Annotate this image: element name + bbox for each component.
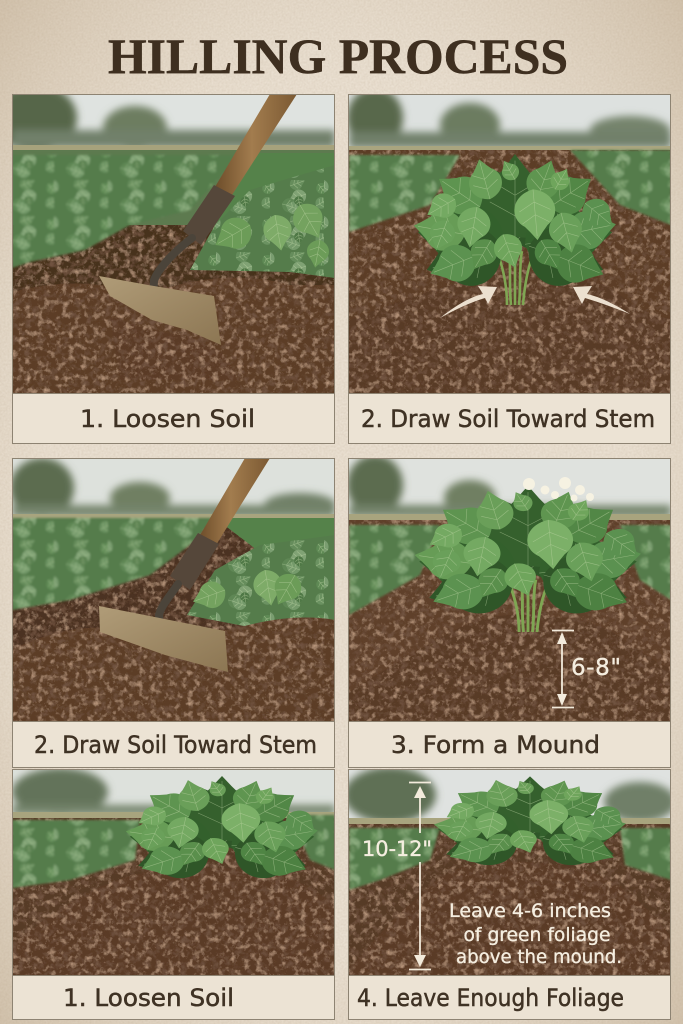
plant bbox=[434, 776, 626, 866]
panel: step 3 draw soil toward stem with hoe bbox=[10, 458, 336, 768]
hoe bbox=[99, 458, 270, 672]
foliage note: above the mound. bbox=[456, 946, 622, 968]
panel: step 6 leave enough foliage bbox=[344, 767, 676, 1020]
foliage note: Leave 4-6 inches bbox=[449, 900, 611, 922]
caption: 1. Loosen Soil bbox=[63, 984, 234, 1012]
photo: hoe loosening soil beside plants bbox=[0, 84, 335, 393]
caption bbox=[12, 394, 334, 444]
title: HILLING PROCESS bbox=[108, 28, 568, 84]
caption: 2. Draw Soil Toward Stem bbox=[361, 405, 655, 433]
height marker 6-8 inches bbox=[552, 630, 621, 708]
foliage note bbox=[450, 902, 620, 964]
plant bbox=[410, 150, 622, 305]
photo: plant with soil drawn up bbox=[347, 88, 671, 393]
caption bbox=[12, 722, 334, 768]
photo: flowering plant on mound with height marker bbox=[347, 455, 671, 721]
flowers bbox=[523, 477, 594, 502]
panel: step 5 loosen soil mound bbox=[12, 768, 336, 1020]
caption bbox=[348, 976, 670, 1020]
caption: 2. Draw Soil Toward Stem bbox=[34, 731, 317, 759]
caption bbox=[348, 722, 670, 768]
arrow right bbox=[573, 286, 630, 314]
arrow left bbox=[440, 286, 497, 318]
hoe bbox=[99, 94, 297, 345]
caption bbox=[12, 976, 334, 1020]
photo: plant atop mound bbox=[12, 768, 336, 975]
caption: 3. Form a Mound bbox=[391, 731, 600, 759]
photo: plant on mound with measurements bbox=[344, 767, 676, 975]
caption: 1. Loosen Soil bbox=[80, 405, 255, 433]
panel: step 2 draw soil toward stem bbox=[347, 88, 671, 444]
height marker 10-12 inches bbox=[362, 782, 432, 970]
height marker 6-8 inches: 6-8" bbox=[571, 655, 621, 681]
plant bbox=[126, 776, 318, 878]
panel: step 1 loosen soil bbox=[0, 84, 335, 444]
caption bbox=[348, 394, 670, 444]
photo: hoe pulling soil bbox=[10, 458, 336, 721]
height marker 10-12 inches: 10-12" bbox=[362, 837, 432, 861]
foliage note: of green foliage bbox=[464, 924, 610, 946]
plant bbox=[411, 482, 647, 632]
caption: 4. Leave Enough Foliage bbox=[357, 984, 624, 1012]
panel: step 4 form a mound bbox=[347, 455, 671, 768]
